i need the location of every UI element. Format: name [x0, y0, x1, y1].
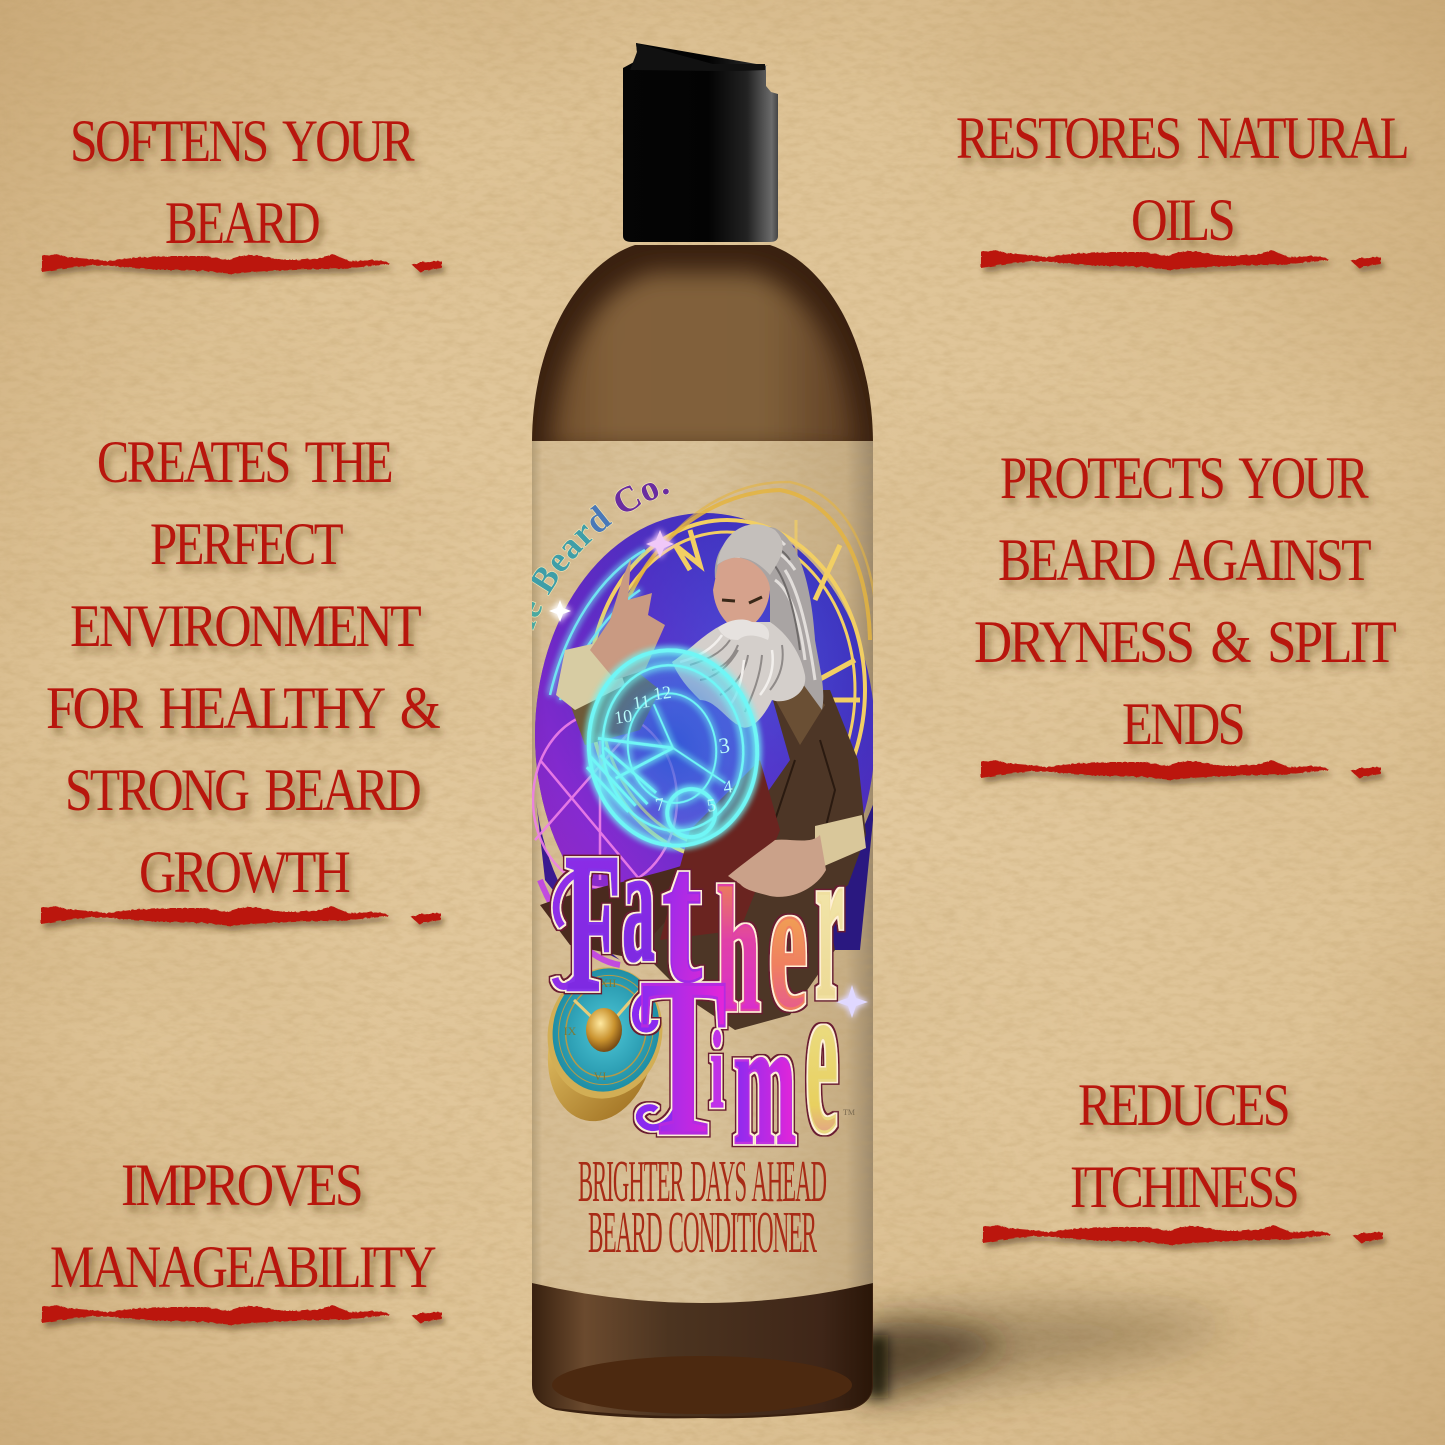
text: BRIGHTER DAYS AHEAD: [578, 1148, 826, 1214]
hair: [715, 526, 823, 710]
benefit: protects your beard: PROTECTS YOUR: [1000, 445, 1369, 511]
benefit: protects your beard: DRYNESS & SPLIT: [974, 609, 1396, 675]
torn red underline: [41, 906, 441, 926]
gold clock rings: [589, 482, 878, 860]
wordmark: Father Time: a: [622, 813, 655, 997]
face: [713, 558, 770, 640]
bottle cast shadow: [860, 1306, 1240, 1400]
spell clock numerals: 11: [631, 691, 651, 713]
torn red underline: [983, 1225, 1383, 1245]
shoulder highlight: [550, 272, 858, 450]
lower bottle tint: [534, 1283, 872, 1416]
watch numerals: [564, 976, 650, 1083]
product bottle: [532, 43, 873, 1418]
hair streak top: [717, 524, 783, 575]
benefit: creates the perfect environment: CREATES THE: [97, 429, 391, 495]
benefit: creates the perfect environment: STRONG BEARD: [65, 757, 420, 823]
benefit: softens your beard: [42, 108, 442, 274]
spell clock: [572, 639, 770, 857]
wordmark: Father Time: e: [769, 838, 807, 1048]
benefit: reduces itchiness: ITCHINESS: [1070, 1154, 1297, 1220]
text: BEARD CONDITIONER: [588, 1199, 817, 1265]
coat and figure: [540, 680, 866, 1030]
spell clock numerals: 3: [717, 732, 731, 759]
benefit: creates the perfect environment: ENVIRONMENT: [70, 593, 421, 659]
benefit: creates the perfect environment: [41, 429, 441, 926]
wordmark: Father Time: t: [662, 811, 702, 1022]
watch numerals: IX: [564, 1024, 577, 1038]
benefit: improves manageability: MANAGEABILITY: [50, 1234, 436, 1300]
benefit: improves manageability: [42, 1152, 442, 1325]
watch numerals: XII: [600, 976, 616, 990]
benefit: restores natural oils: [956, 105, 1407, 270]
torn red underline: [981, 250, 1381, 270]
watch numerals: VI: [594, 1069, 606, 1083]
spell clock numerals: 7: [654, 794, 666, 815]
wordmark: Father Time: r: [816, 795, 844, 1046]
torn red underline: [42, 254, 442, 274]
spell clock numerals: 5: [705, 795, 717, 816]
benefit: creates the perfect environment: FOR HEALTHY &: [46, 675, 440, 741]
benefit: softens your beard: BEARD: [165, 190, 319, 256]
spell clock numerals: 4: [722, 776, 734, 797]
moustache: [718, 620, 769, 640]
sparkles: [549, 530, 868, 1018]
magenta clock rings: [533, 712, 677, 965]
wordmark: Father Time: e: [806, 935, 838, 1178]
benefit: protects your beard: [974, 445, 1396, 780]
magic clock backdrop: [535, 513, 875, 960]
F swashes: [555, 872, 590, 986]
wordmark: Father Time: i: [710, 1010, 724, 1131]
watch numerals: III: [638, 1024, 650, 1038]
wordmark: Father Time: F: [565, 811, 621, 1034]
benefit: reduces itchiness: REDUCES: [1078, 1072, 1288, 1138]
label artwork: [532, 480, 873, 1148]
benefit: creates the perfect environment: GROWTH: [139, 839, 350, 905]
pocket watch: [535, 957, 674, 1131]
bottle cap: [623, 43, 778, 242]
eyes: [722, 597, 762, 603]
watch hands: [574, 990, 640, 1030]
beard: [672, 622, 805, 728]
T swashes: [635, 991, 680, 1128]
benefit: protects your beard: BEARD AGAINST: [998, 527, 1371, 593]
raised arm and hand: [556, 558, 665, 745]
bottle shoulder and body: [532, 245, 873, 1418]
wordmark: Father Time: m: [733, 983, 796, 1182]
lower open hand: [728, 835, 826, 897]
benefit: reduces itchiness: [983, 1072, 1383, 1245]
benefit: softens your beard: SOFTENS YOUR: [70, 108, 415, 174]
benefit: restores natural oils: OILS: [1131, 187, 1233, 253]
torn red underline: [42, 1305, 442, 1325]
spell clock numerals: 12: [652, 682, 673, 704]
bottle base liquid: [552, 1356, 852, 1414]
benefit: creates the perfect environment: PERFECT: [150, 511, 343, 577]
wordmark: Father Time: [555, 795, 844, 1183]
torn red underline: [981, 760, 1381, 780]
gold rays lower right: [790, 875, 842, 930]
trademark: TM: [843, 1108, 855, 1117]
paper label: [532, 441, 873, 1303]
spell clock numerals: [610, 675, 739, 827]
spell clock numerals: 10: [613, 705, 633, 728]
benefit: improves manageability: IMPROVES: [121, 1152, 361, 1218]
cyan arcs: [550, 550, 645, 700]
wordmark: Father Time: h: [716, 851, 760, 1050]
benefit: protects your beard: ENDS: [1122, 691, 1243, 757]
wordmark: Father Time: T: [640, 932, 727, 1183]
